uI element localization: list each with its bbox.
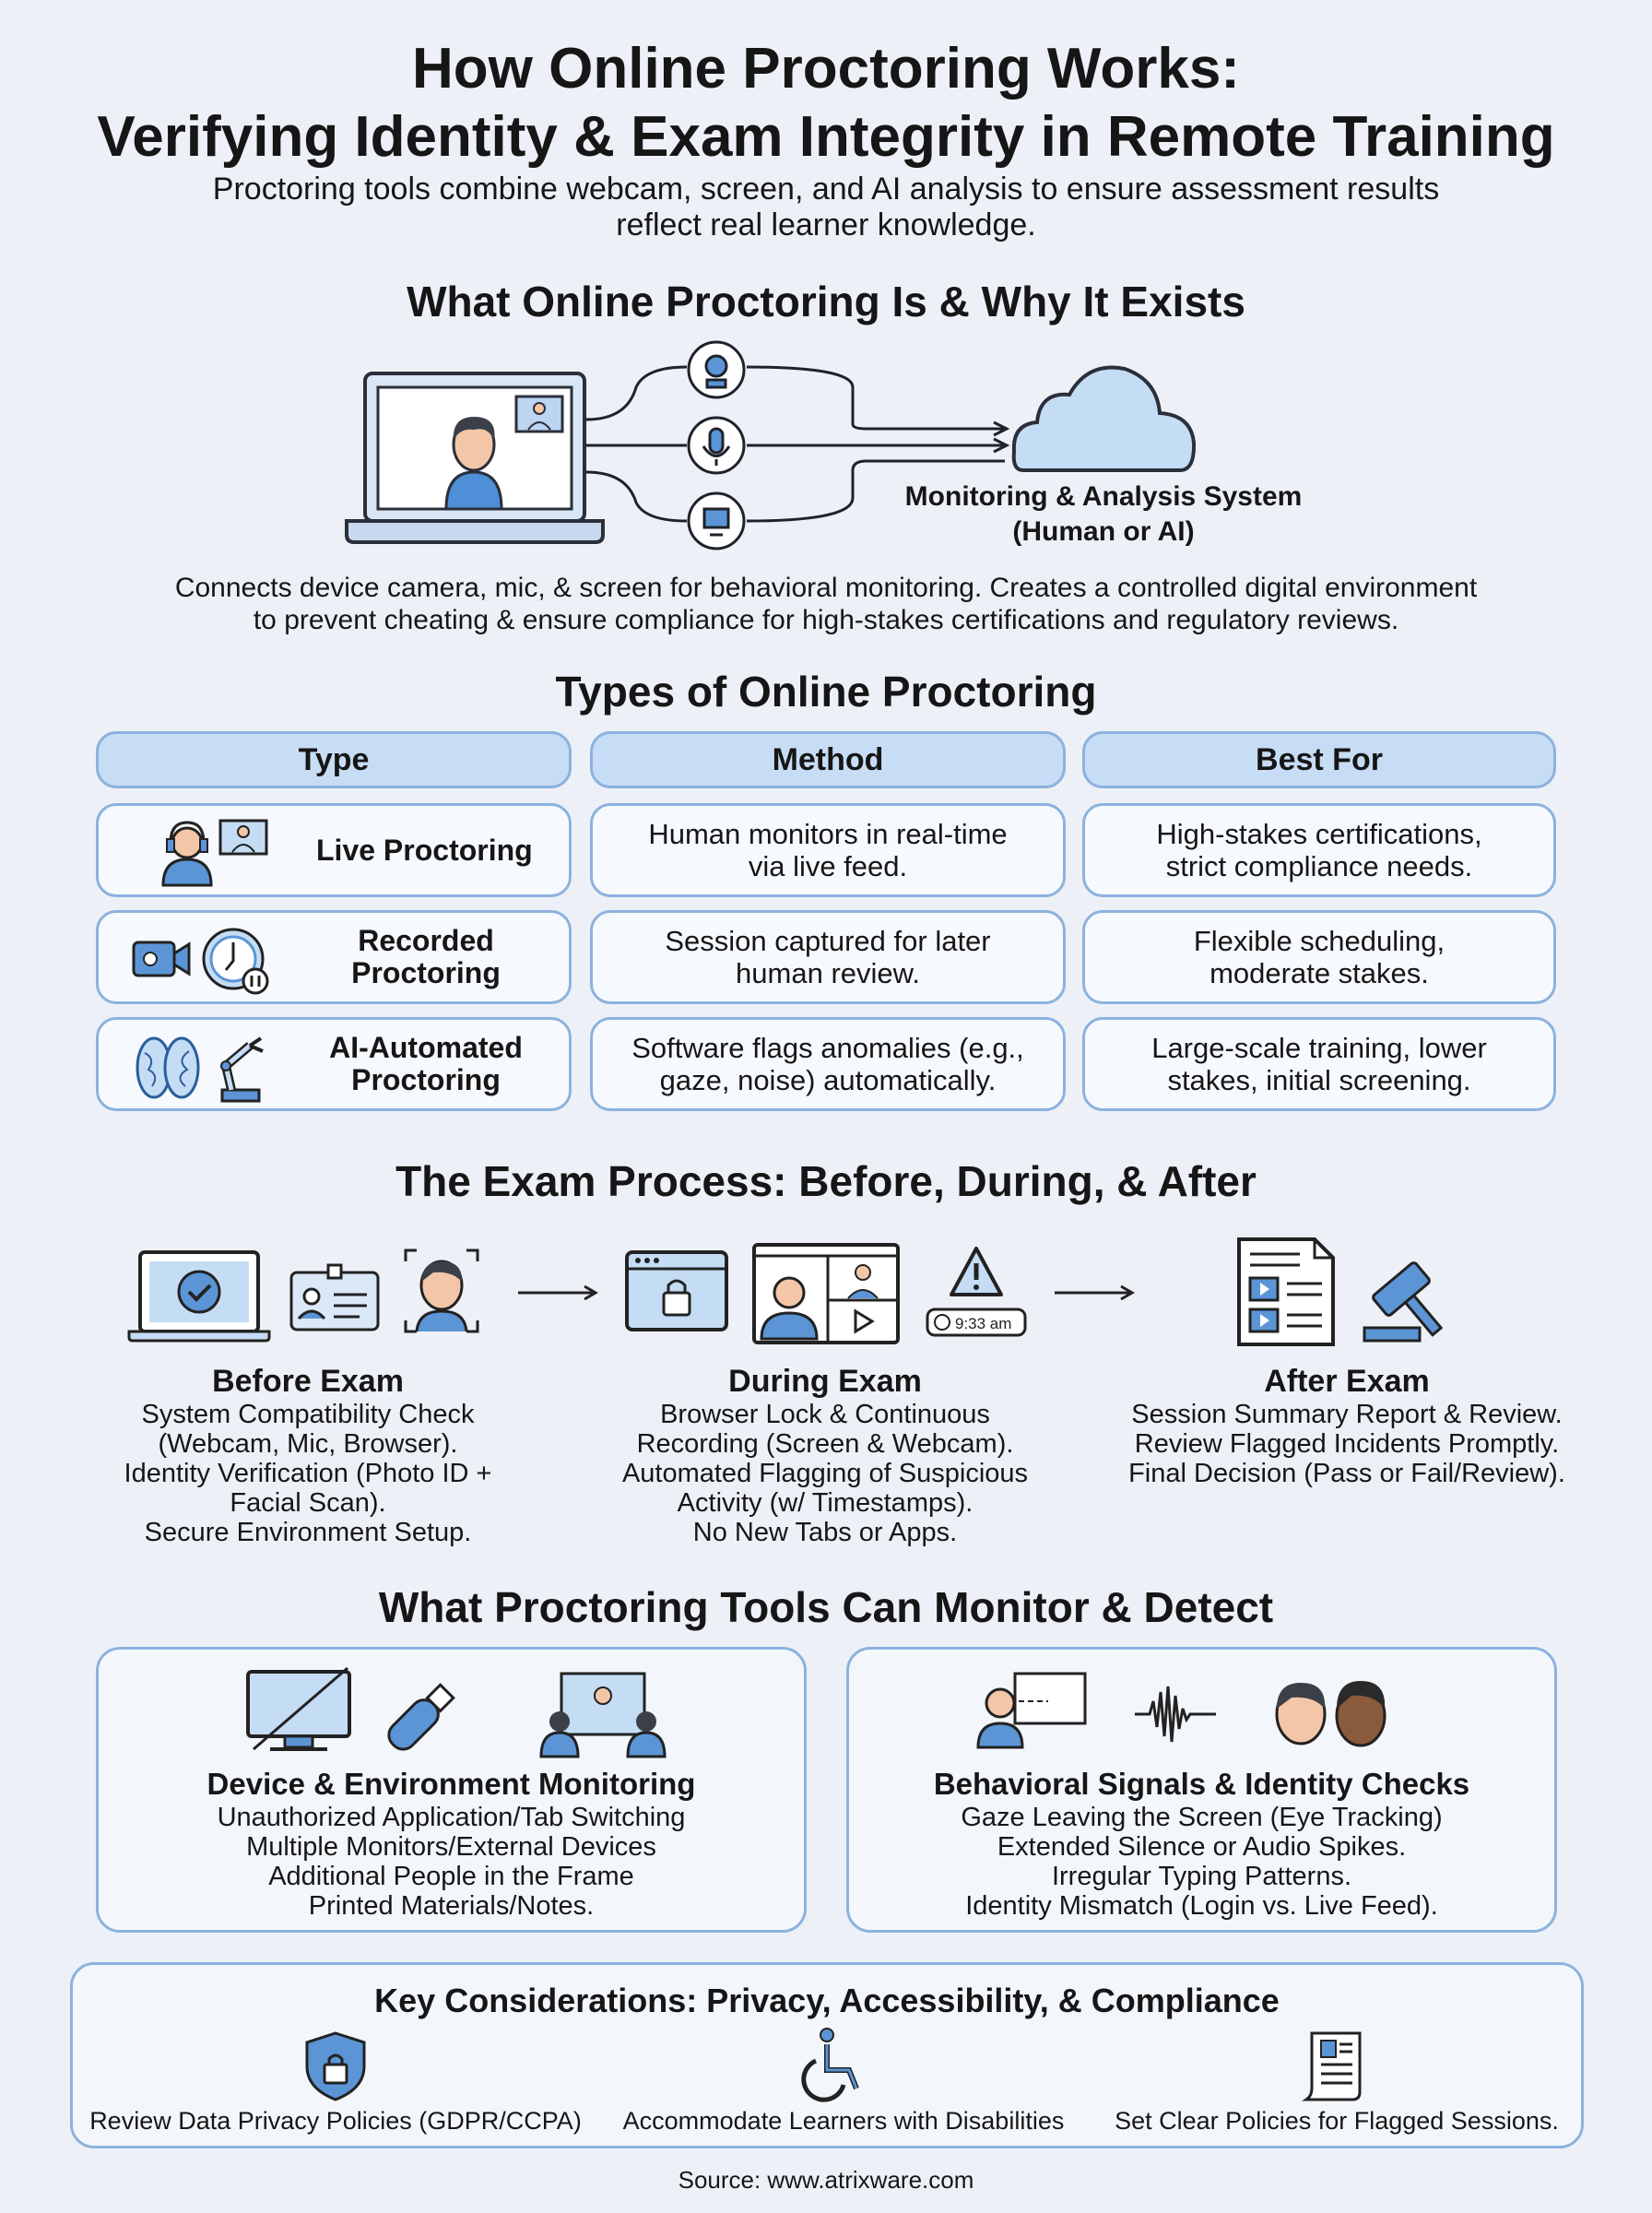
subtitle: reflect real learner knowledge. [616,207,1036,243]
panel: behavioral signals [846,1647,1557,1933]
key considerations title: Key Considerations: Privacy, Accessibility, & Compliance [374,1982,1280,2019]
heading: monitor & detect: What Proctoring Tools Can Monitor & Detect [379,1583,1273,1631]
icon: policy document [1302,2032,1361,2101]
icon: shield [306,2031,365,2101]
table: types of proctoring: Software flags anomalies (e.g., [631,1032,1024,1064]
panel text: Identity Mismatch (Login vs. Live Feed). [965,1891,1438,1921]
table: types of proctoring: Session captured for later [665,925,991,957]
table: types of proctoring [96,731,1556,1111]
heading: exam process: The Exam Process: Before, During, & After [395,1157,1257,1205]
text: before exam: Secure Environment Setup. [145,1518,471,1547]
panel text [207,1767,695,1921]
panel text [934,1767,1469,1921]
source: Source: www.atrixware.com [678,2166,974,2194]
heading: what online proctoring is: What Online Proctoring Is & Why It Exists [407,278,1245,325]
panel: key considerations: Set Clear Policies for Flagged Sessions. [1115,2107,1559,2135]
label: monitoring system: Monitoring & Analysis System [905,481,1302,512]
row: recorded proctoring: Recorded [358,924,494,957]
row: live proctoring: Live Proctoring [316,834,533,867]
arrow [1055,1285,1135,1300]
panel: device & environment [96,1647,807,1933]
row: AI proctoring [96,1017,572,1111]
table: types of proctoring: Human monitors in real-time [648,818,1008,850]
table: types of proctoring: Method [773,741,883,776]
icon: cloud [1014,368,1194,470]
icons: gaze, audio wave, faces [977,1673,1386,1748]
row: recorded proctoring: Proctoring [351,956,501,989]
table header: Type [299,741,369,776]
title: How Online Proctoring Works: [412,37,1240,101]
icon: laptop with person [347,373,603,542]
subtitle [213,172,1439,243]
heading: types: Types of Online Proctoring [555,668,1096,716]
icon: accessibility [801,2028,859,2102]
text: before exam: System Compatibility Check [142,1400,474,1429]
panel text: Multiple Monitors/External Devices [246,1832,656,1862]
panel text: Irregular Typing Patterns. [1052,1862,1351,1891]
table: types of proctoring: Flexible scheduling, [1194,925,1445,957]
icons: after exam [1237,1237,1444,1346]
panel text: Extended Silence or Audio Spikes. [997,1832,1406,1862]
description: Connects device camera, mic, & screen for behavioral monitoring. Creates a controlled digital environment [175,573,1477,603]
table: types of proctoring: gaze, noise) automatically. [660,1064,996,1096]
panel: key considerations [70,1962,1584,2148]
text: before exam [124,1364,491,1547]
row: live proctoring [96,803,572,897]
text: during exam: Automated Flagging of Suspicious [622,1459,1028,1488]
icons: during exam: 9:33 am [955,1315,1011,1332]
table: types of proctoring: moderate stakes. [1210,957,1429,989]
panel text: Unauthorized Application/Tab Switching [218,1803,685,1832]
text: after exam: Session Summary Report & Review. [1131,1400,1563,1429]
icons: during exam [625,1243,1027,1344]
text: during exam [622,1364,1028,1547]
table: types of proctoring: Best For [1256,741,1383,776]
title [97,37,1555,169]
text: during exam: Activity (w/ Timestamps). [678,1488,973,1518]
text: before exam: Facial Scan). [230,1488,386,1518]
row: AI proctoring: Proctoring [351,1063,501,1096]
arrow [518,1285,598,1300]
text: before exam: (Webcam, Mic, Browser). [159,1429,457,1459]
text: after exam [1128,1364,1565,1488]
label: monitoring system: (Human or AI) [1012,516,1195,547]
table header [96,731,572,788]
table: types of proctoring: human review. [736,957,920,989]
icons: before exam [127,1249,479,1343]
panel text: Printed Materials/Notes. [309,1891,594,1921]
subtitle: Proctoring tools combine webcam, screen, and AI analysis to ensure assessment results [213,172,1439,207]
text: during exam: No New Tabs or Apps. [693,1518,957,1547]
icons: monitor, usb, people [246,1667,666,1757]
icons: webcam, mic, screen [689,342,744,549]
panel text: Behavioral Signals & Identity Checks [934,1767,1469,1801]
text: after exam: After Exam [1264,1364,1430,1399]
panel text: Gaze Leaving the Screen (Eye Tracking) [961,1803,1443,1832]
panel: key considerations: Accommodate Learners with Disabilities [623,2107,1064,2135]
title: Verifying Identity & Exam Integrity in Remote Training [97,105,1555,169]
panel text: Additional People in the Frame [268,1862,634,1891]
text: during exam: During Exam [728,1364,922,1399]
diagram: laptop to cloud [345,341,1197,550]
table: types of proctoring: via live feed. [749,850,907,882]
panel text: Device & Environment Monitoring [207,1767,695,1801]
label: monitoring system [905,481,1302,547]
row: recorded proctoring [96,910,572,1004]
row: AI proctoring: AI-Automated [329,1031,523,1064]
text: during exam: Recording (Screen & Webcam). [637,1429,1013,1459]
text: during exam: Browser Lock & Continuous [660,1400,990,1429]
description [175,573,1477,635]
text: after exam: Review Flagged Incidents Promptly. [1135,1429,1559,1459]
connector lines [586,367,1007,521]
table: types of proctoring: High-stakes certifications, [1156,818,1482,850]
text: before exam: Identity Verification (Photo ID + [124,1459,491,1488]
table: types of proctoring: Large-scale training, lower [1151,1032,1487,1064]
table: types of proctoring: strict compliance needs. [1166,850,1472,882]
text: before exam: Before Exam [212,1364,404,1399]
table: types of proctoring: stakes, initial screening. [1167,1064,1471,1096]
consideration labels: Review Data Privacy Policies (GDPR/CCPA) [89,2107,582,2135]
description: to prevent cheating & ensure compliance for high-stakes certifications and regulatory reviews. [254,605,1398,635]
text: after exam: Final Decision (Pass or Fail/Review). [1128,1459,1565,1488]
